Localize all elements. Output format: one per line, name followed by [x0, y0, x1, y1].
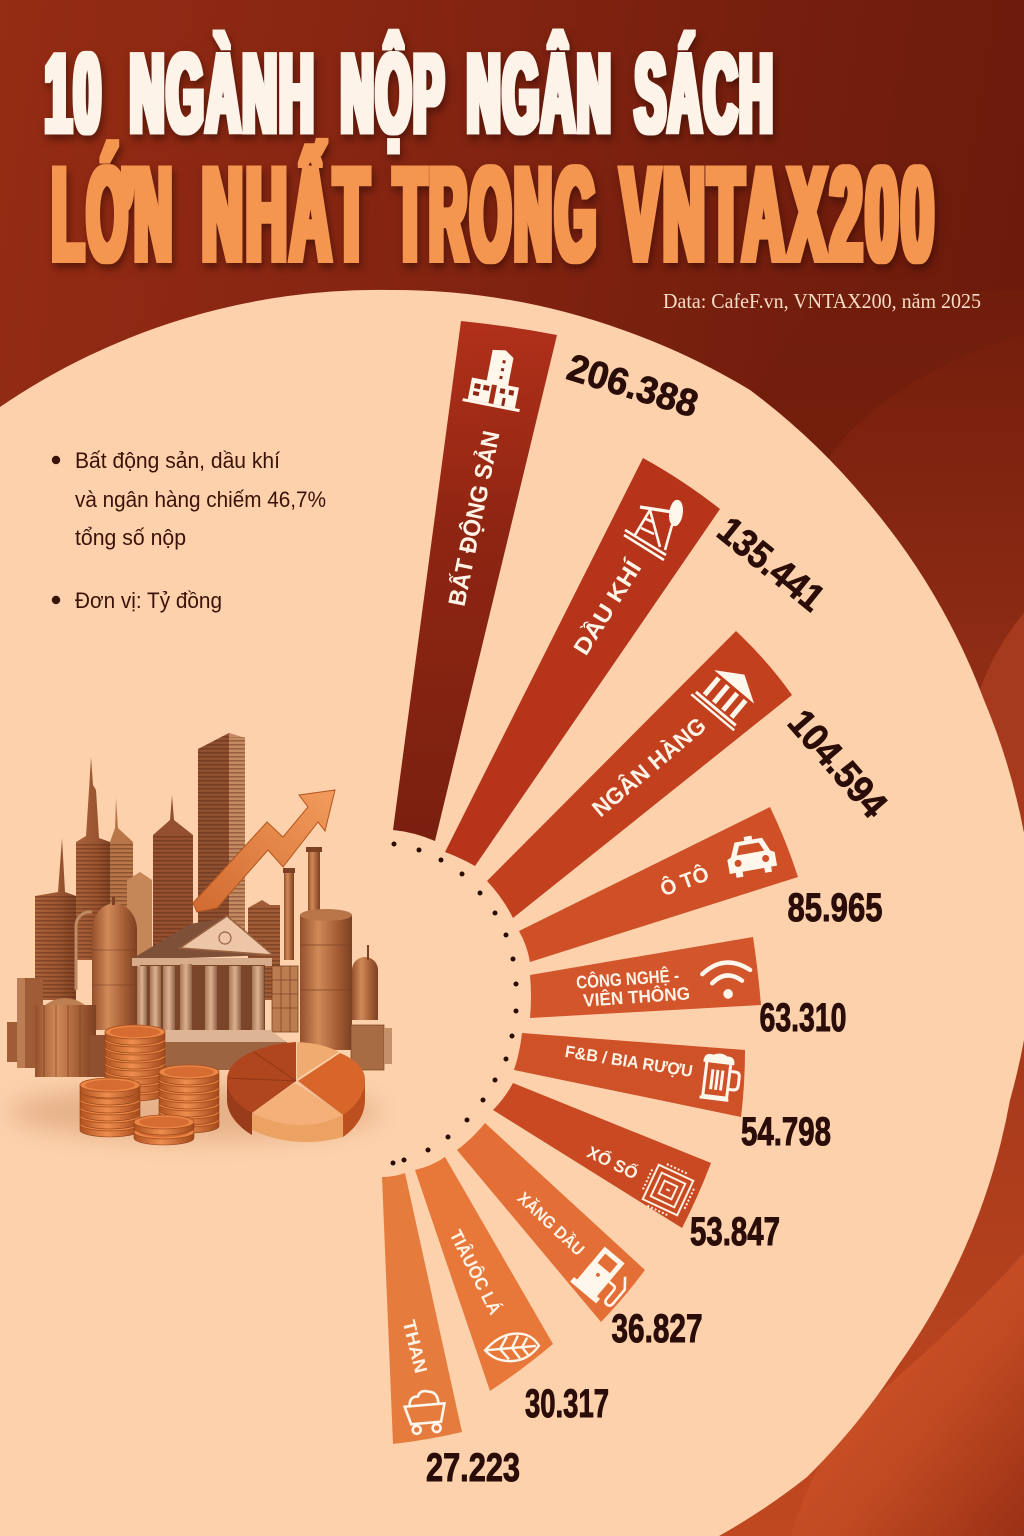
value: 30.317: 30.317	[525, 1382, 609, 1426]
title line 2: LỚN	[52, 141, 175, 289]
pie chart	[227, 1042, 365, 1142]
bar: Ô tô	[519, 807, 798, 962]
left tanks and boxes	[7, 897, 137, 1077]
source note: Data: CafeF.vn, VNTAX200, năm 2025	[663, 289, 981, 313]
value: 135.441: 135.441	[709, 509, 832, 620]
value: 54.798: 54.798	[741, 1110, 831, 1154]
label: F&B / BIA RƯỢU	[564, 1042, 694, 1081]
text block: notes	[52, 448, 326, 613]
value: 104.594: 104.594	[779, 702, 895, 826]
text block: notes: và ngân hàng chiếm 46,7%	[75, 487, 326, 512]
icon: bank	[691, 657, 766, 731]
bar: Xăng dầu	[457, 1123, 645, 1322]
industrial stacks and right buildings	[248, 847, 392, 1070]
label: THAN	[399, 1318, 431, 1375]
icon: lottery ticket	[637, 1159, 699, 1221]
icon: car	[724, 832, 778, 879]
title line 2: NHẤT	[202, 139, 372, 289]
icon: coal cart	[403, 1389, 447, 1435]
text block: notes: Đơn vị: Tỷ đồng	[75, 588, 222, 613]
tall tower	[198, 733, 245, 935]
growth arrow	[193, 790, 335, 912]
label: XỔ SỐ	[584, 1142, 641, 1183]
dotted arc	[390, 842, 518, 1166]
icon: fuel pump	[570, 1244, 638, 1312]
value: 85.965: 85.965	[788, 886, 882, 930]
value: 36.827: 36.827	[612, 1307, 702, 1351]
label line 2: VIÊN THÔNG	[582, 982, 691, 1011]
value: 206.388: 206.388	[562, 347, 703, 426]
bar: Bất động sản	[393, 321, 557, 841]
title line 1: NỘP	[341, 31, 446, 156]
icon: buildings	[462, 344, 530, 412]
value: 63.310: 63.310	[760, 996, 846, 1040]
value: 27.223: 27.223	[426, 1446, 520, 1490]
bar: Dầu khí	[445, 458, 720, 866]
title line 1: NGÂN	[467, 31, 613, 156]
bar: Than	[382, 1173, 462, 1444]
label: DẦU KHÍ	[567, 555, 647, 660]
label: TIÂUÔC LÁ	[446, 1226, 506, 1318]
label: BẤT ĐỘNG SẢN	[442, 428, 506, 608]
icon: oil pump	[624, 500, 683, 560]
label line 1: CÔNG NGHỆ -	[575, 964, 680, 993]
title line 1: 10	[45, 31, 103, 156]
title line 1: NGÀNH	[130, 31, 316, 156]
bar: Xổ số	[493, 1083, 711, 1228]
title line 2	[52, 139, 937, 289]
left towers	[35, 757, 193, 1000]
value: 53.847: 53.847	[690, 1210, 780, 1254]
bank building	[130, 916, 287, 1070]
illustration: city, bank, coins, pie chart	[7, 733, 392, 1145]
title line 2: TRONG	[394, 141, 599, 289]
icon: beer mug	[700, 1053, 742, 1101]
icon: leaf	[484, 1332, 540, 1363]
bar: Thuốc lá	[415, 1157, 553, 1391]
label: Ô TÔ	[657, 862, 712, 901]
coin stacks	[80, 1025, 219, 1145]
icon: wifi	[701, 960, 752, 1001]
text block: notes: tổng số nộp	[75, 525, 186, 550]
bar: Ngân hàng	[487, 631, 792, 918]
label: XĂNG DẦU	[514, 1188, 588, 1260]
title: SÁCH	[635, 31, 775, 156]
title	[45, 31, 937, 289]
title line 1	[45, 31, 775, 156]
label: NGÂN HÀNG	[586, 711, 711, 822]
bar: F&B / Bia rượu	[514, 1033, 745, 1117]
text block: notes: Bất động sản, dầu khí	[75, 448, 280, 473]
bar: Công nghệ - Viên thông	[530, 937, 761, 1018]
